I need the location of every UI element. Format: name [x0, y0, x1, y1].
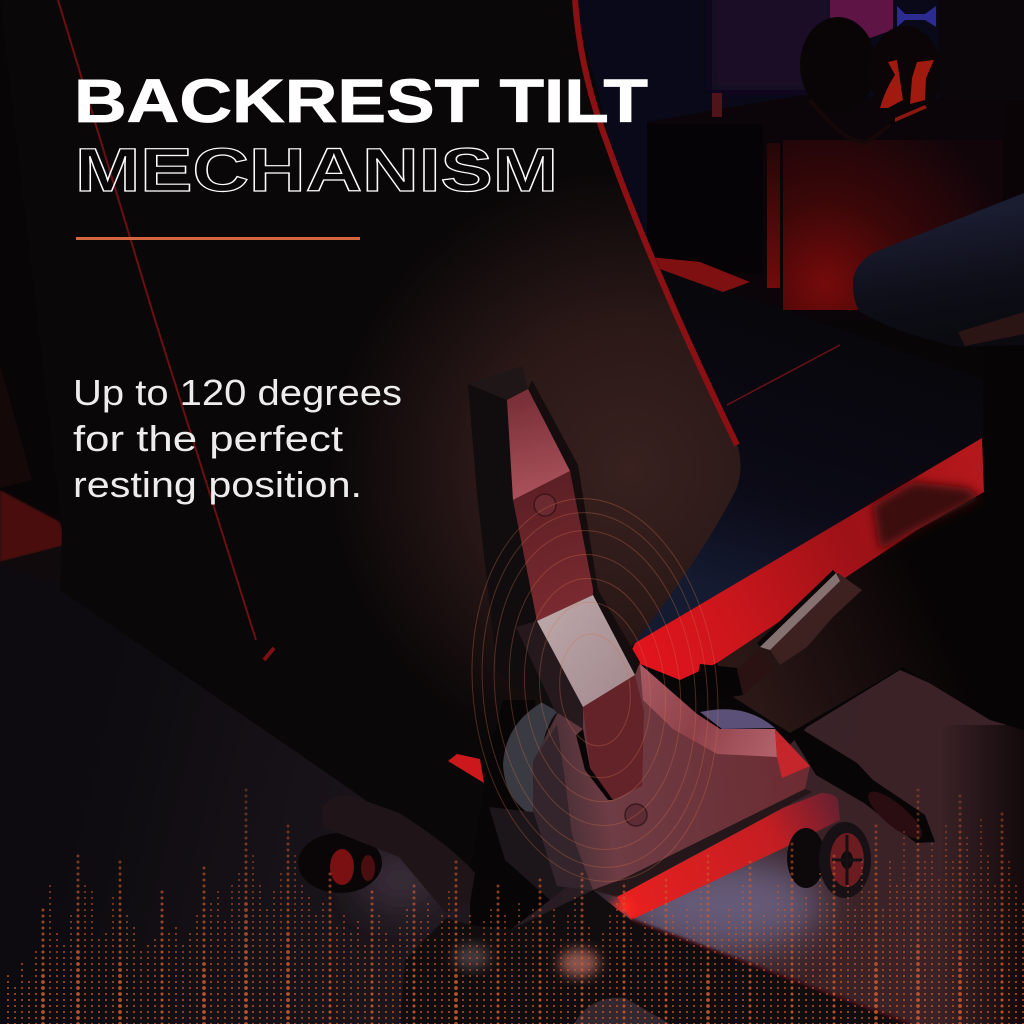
bracket middle maroon panel — [513, 471, 593, 621]
bracket grey shadow facet — [516, 621, 583, 729]
body text: for the perfect — [73, 418, 343, 459]
carpet: lit purple patch — [615, 857, 825, 953]
mechanism: upright bracket — [468, 366, 644, 800]
red lit base arm — [612, 793, 840, 920]
wall: blue ornament — [897, 6, 936, 27]
bracket right side edge — [528, 380, 640, 675]
room: navy wall at upper right — [570, 0, 1024, 300]
lower rivet — [625, 804, 647, 826]
foreground black base star — [400, 890, 911, 1024]
foreground tube arm — [322, 795, 475, 913]
equalizer dot pattern — [8, 785, 1023, 1024]
base lit upper strip — [640, 664, 777, 757]
orange divider — [76, 237, 360, 240]
mechanism: pivot housing — [470, 700, 560, 930]
bracket light block — [537, 595, 635, 707]
right caster wheel — [787, 822, 871, 898]
carpet: left lit patch — [355, 850, 445, 910]
desk: dark unit with red glow — [647, 93, 1024, 320]
base lower dark skirt — [593, 789, 812, 897]
blue seat reflection — [700, 709, 775, 729]
lower large dots — [43, 900, 960, 1024]
seat underside — [717, 500, 1024, 733]
mechanism: pivot ring — [503, 698, 558, 816]
title line 1: solid: BACKREST TILT — [74, 67, 648, 135]
minor dot columns — [8, 815, 1023, 1024]
wall: purple glow — [712, 0, 832, 90]
title — [74, 67, 648, 204]
base dark left facet — [533, 725, 593, 890]
body text: resting position. — [73, 464, 362, 505]
bracket lower panel — [583, 675, 644, 800]
bracket black left face — [468, 384, 583, 729]
black backrest side panel — [0, 0, 700, 880]
mechanism: grey lower facet — [489, 807, 579, 900]
backrest red piping left — [58, 0, 256, 640]
major dot columns — [43, 785, 1002, 1024]
concentric rings overlay — [454, 486, 736, 894]
seat red lit band — [630, 438, 984, 680]
wall: magenta panel — [830, 0, 893, 38]
title line 2: outlined: MECHANISM — [75, 136, 558, 204]
backrest red piping right — [575, 0, 737, 445]
carpet: dark right edge — [940, 725, 1024, 1024]
adjustment lever — [695, 570, 862, 700]
left caster wheel — [298, 833, 382, 893]
red fabric flash left of mechanism — [448, 754, 484, 783]
foreground highlights — [454, 920, 911, 1024]
left wall and skirting with red glow — [0, 365, 70, 600]
black cable and pedal — [790, 728, 935, 845]
backrest fabric — [260, 0, 741, 880]
carpet floor — [0, 565, 1024, 1024]
bracket upper pink panel — [507, 389, 570, 500]
seat red piping — [650, 257, 750, 292]
mechanism: base plate — [533, 664, 810, 890]
seat seam — [727, 345, 840, 405]
armrest shadow on band — [873, 482, 982, 550]
body text — [73, 372, 402, 505]
bracket upper rivet — [534, 494, 556, 516]
right armrest post — [983, 330, 1024, 730]
small red piping mark — [264, 648, 274, 660]
bracket top cap — [468, 366, 528, 400]
base red tip — [775, 729, 810, 778]
seat cushion — [630, 262, 985, 646]
right armrest — [853, 193, 1024, 347]
bracket hinge slit — [576, 729, 613, 800]
icon: headset on desk — [800, 17, 941, 142]
wall: dark right side — [938, 0, 1024, 110]
body text: Up to 120 degrees — [73, 372, 402, 413]
